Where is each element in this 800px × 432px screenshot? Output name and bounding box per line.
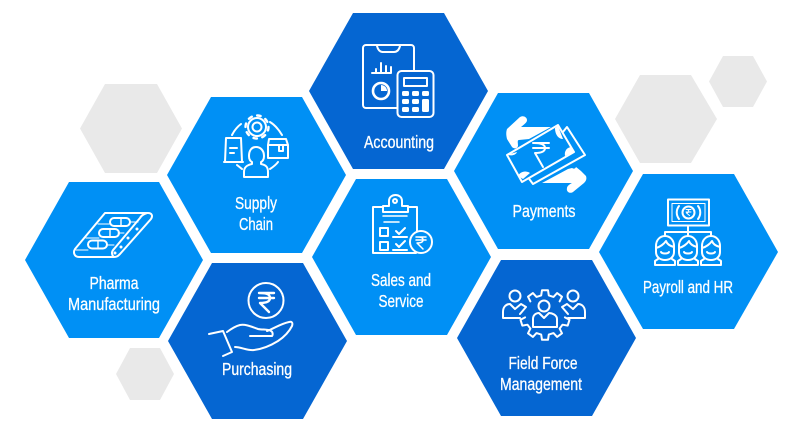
- icon: clipboard and calculator: [363, 45, 434, 117]
- label: Payroll and HR: Payroll and HR: [643, 277, 733, 297]
- panel: Supply Chain: [167, 97, 346, 253]
- panel: Payroll and HR: [599, 174, 778, 329]
- icon: team inside a gear: [503, 290, 585, 340]
- panel: Accounting: [309, 13, 488, 169]
- panel: Purchasing: [168, 263, 347, 419]
- grey hexagon: upper right large: [615, 75, 717, 163]
- label: Manufacturing: Manufacturing: [68, 294, 160, 314]
- label: Payments: Payments: [512, 201, 576, 221]
- label: Service: Service: [378, 291, 424, 311]
- grey hexagon: left: [80, 84, 182, 173]
- icon: rupee sign: [533, 143, 549, 167]
- label: Accounting: Accounting: [364, 132, 434, 152]
- label: Pharma: Pharma: [90, 273, 139, 293]
- label: Field Force: Field Force: [508, 353, 578, 373]
- label: Management: Management: [500, 374, 582, 394]
- label: Purchasing: Purchasing: [222, 359, 292, 379]
- icon: back banknote: [527, 127, 585, 184]
- icon: checklist clipboard with rupee: [373, 195, 432, 253]
- grey hexagon: lower left small: [116, 348, 174, 400]
- icon: front banknote: [507, 125, 574, 182]
- grey hexagon: upper right small: [709, 56, 767, 107]
- icon: pill conveyor belt: [74, 213, 152, 257]
- panel: Pharma Manufacturing: [25, 182, 203, 338]
- icon: supply chain person with gear, box and document: [224, 116, 288, 177]
- label: Chain: Chain: [239, 214, 273, 234]
- icon: banknote over three employees: [655, 200, 721, 265]
- panel: Payments: [454, 93, 633, 249]
- label: Supply: Supply: [235, 193, 277, 213]
- icon: right arrow: [542, 167, 586, 193]
- panel: Sales and Service: [312, 179, 491, 335]
- icon: banknotes with exchange arrows: [506, 116, 586, 193]
- icon: left arrow: [506, 116, 551, 148]
- icon: hand holding rupee coin: [209, 283, 292, 356]
- label: Sales and: Sales and: [371, 270, 431, 290]
- panel: Field Force Management: [457, 260, 636, 416]
